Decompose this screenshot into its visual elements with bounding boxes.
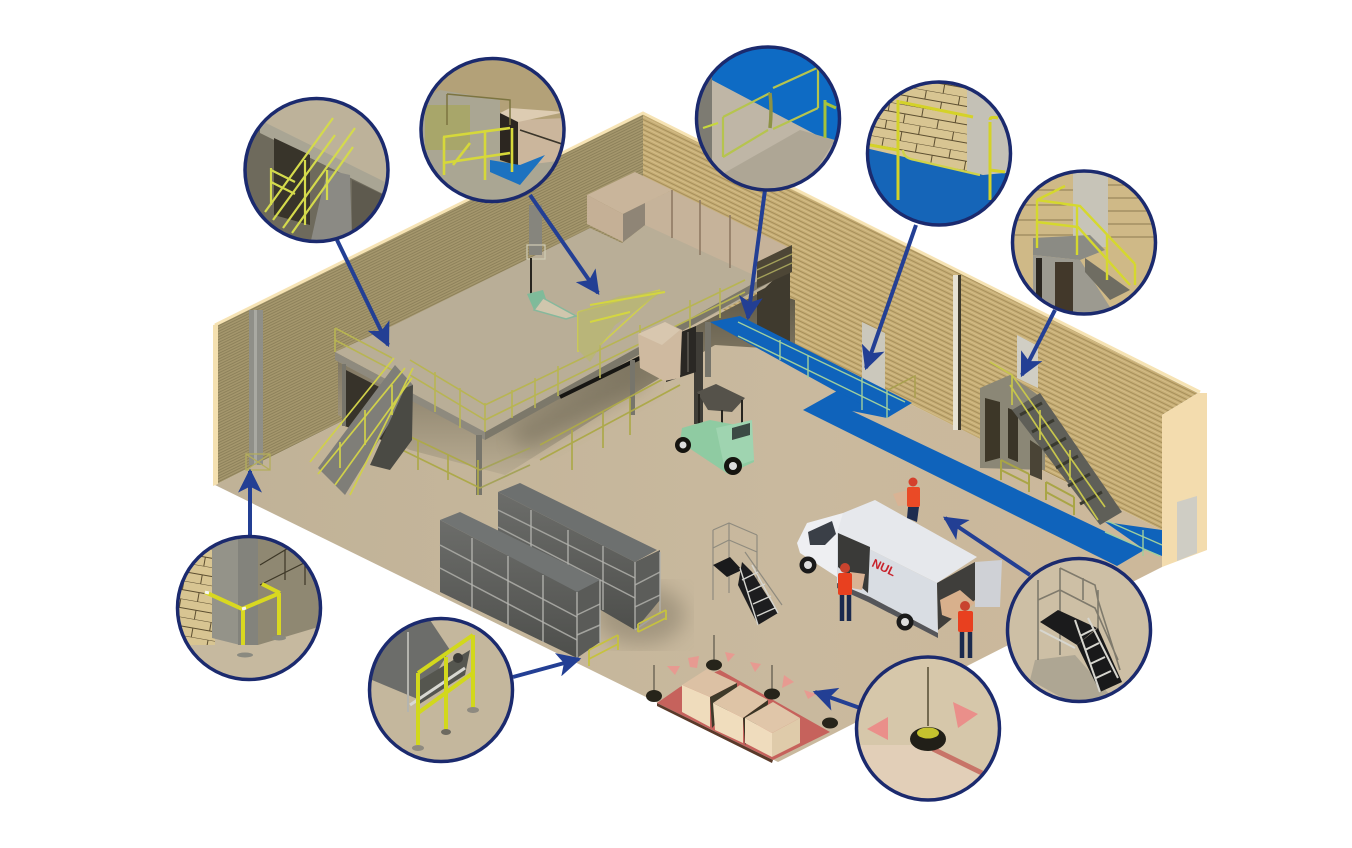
- callout: stair railing: [243, 96, 390, 244]
- callout: column guard: [175, 535, 325, 685]
- dark stair opening: [342, 368, 395, 445]
- stacked boxes on mezzanine: [587, 172, 790, 278]
- callout: safety robot: [855, 655, 1005, 805]
- side door on end cap: [1177, 496, 1197, 561]
- right wall end cap: [1162, 393, 1207, 567]
- right platform frame: [980, 375, 1045, 480]
- arrow: dock gate callout: [748, 190, 765, 318]
- left corner column: [246, 310, 270, 470]
- arrow: column guard callout: [248, 471, 252, 536]
- right wall column: [953, 275, 961, 430]
- arrow: right stairs callout: [1022, 310, 1055, 375]
- shelving unit front: [440, 512, 600, 658]
- callout: safety stair platform: [1005, 556, 1155, 706]
- floor level railing: [392, 370, 680, 495]
- wall top edge highlight: [215, 113, 1200, 392]
- callout: mezzanine pallet gate: [420, 55, 570, 205]
- van logo: NUL: [870, 556, 898, 579]
- main staircase: [310, 358, 413, 495]
- right wall: [643, 113, 1198, 530]
- right staircase: [990, 362, 1122, 525]
- under mezzanine shadow: [338, 290, 795, 475]
- shelving unit rear: [498, 483, 660, 630]
- dock opening under deck: [757, 268, 790, 345]
- shelving shadow: [595, 585, 685, 645]
- pallet truck: [527, 258, 576, 319]
- callout: shelf guard: [365, 615, 515, 765]
- safety robots and markers: [646, 635, 838, 728]
- left wall: [215, 113, 643, 485]
- floor shadow under mezzanine: [510, 365, 650, 450]
- arrow: stairs callout: [337, 240, 388, 345]
- rear mezzanine column: [527, 205, 545, 259]
- right wall door 2: [1017, 335, 1038, 388]
- van: [797, 500, 1002, 638]
- warehouse floor: [215, 270, 1162, 762]
- walkway railing: [738, 322, 1162, 556]
- pointer arrows: [250, 190, 1055, 708]
- yellow rail at walkway end: [888, 376, 915, 398]
- dock leveller railing box: [757, 245, 792, 288]
- right wall door 1: [862, 322, 885, 395]
- left wall end cap: [213, 324, 218, 486]
- forklift: [638, 322, 754, 475]
- warehouse building: [213, 113, 1207, 763]
- callout: upper landing stairs: [1010, 170, 1160, 322]
- worker behind van: [893, 478, 920, 522]
- arrow: shelf guard callout: [513, 659, 579, 677]
- arrow: wall gate callout: [866, 225, 916, 368]
- arrow: mezzanine gate callout: [530, 195, 598, 293]
- blue walkway end: [1105, 522, 1162, 556]
- red safety zone: [657, 670, 830, 760]
- worker at van rear: [958, 601, 973, 658]
- mezzanine support posts: [342, 322, 711, 495]
- small rails at platform base: [1001, 460, 1074, 515]
- warehouse infographic: [176, 45, 1207, 802]
- mezzanine railing: [335, 280, 745, 432]
- pallet gate: [578, 290, 665, 362]
- worker at side door: [838, 563, 865, 621]
- callout: swing gate on blue walkway: [695, 45, 845, 195]
- mezzanine deck: [335, 225, 792, 432]
- deck edge: [335, 262, 792, 440]
- safety stair platform: [713, 523, 782, 625]
- pallet boxes: [657, 669, 800, 763]
- arrow: robot callout: [815, 692, 860, 708]
- shelf end guards: [589, 610, 666, 666]
- blue walkway upper: [710, 316, 912, 418]
- callout: swing gate at wall: [865, 80, 1015, 230]
- blue walkway lower: [803, 391, 1146, 566]
- arrow: platform callout: [945, 518, 1030, 575]
